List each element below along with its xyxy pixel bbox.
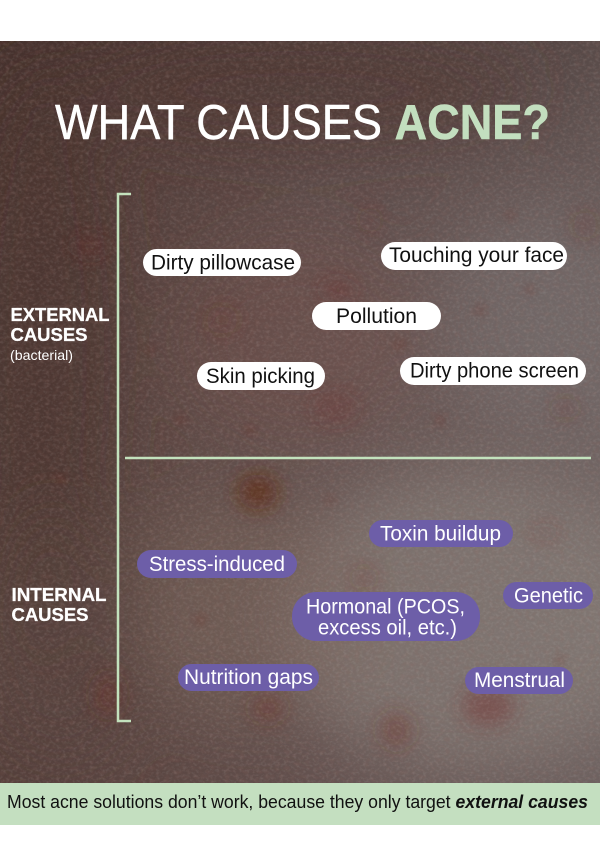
pill: genetic: Genetic	[514, 584, 583, 608]
pill: pollution	[312, 302, 441, 330]
label: internal causes: CAUSES	[12, 604, 88, 625]
label: external causes: (bacterial)	[10, 347, 73, 363]
bracket and divider lines	[118, 194, 591, 721]
internal cause pills	[137, 520, 593, 694]
pill: stress-induced: Stress-induced	[149, 553, 285, 576]
pill: menstrual: Menstrual	[474, 669, 565, 692]
pill: toxin buildup: Toxin buildup	[380, 522, 501, 546]
footer banner: Most acne solutions don’t work, because they only target external causes	[7, 791, 588, 812]
pill: nutrition gaps: Nutrition gaps	[184, 666, 313, 689]
title: WHAT CAUSES ACNE?	[55, 96, 550, 150]
footer banner	[0, 783, 600, 825]
label: external causes: CAUSES	[10, 324, 88, 345]
pill: skin picking: Skin picking	[206, 365, 315, 388]
label: internal causes	[12, 584, 106, 625]
pill: pollution: Pollution	[336, 305, 417, 328]
pill: dirty pillowcase: Dirty pillowcase	[151, 252, 295, 274]
pill: touching your face: Touching your face	[389, 244, 564, 267]
label: external causes: EXTERNAL	[10, 304, 110, 325]
label: internal causes: INTERNAL	[12, 584, 106, 605]
pill: hormonal: excess oil, etc.)	[318, 616, 457, 640]
pill: dirty phone screen: Dirty phone screen	[410, 360, 579, 382]
pill: hormonal	[292, 592, 480, 641]
pill: hormonal: Hormonal (PCOS,	[306, 596, 465, 618]
pill: genetic	[503, 582, 593, 609]
external cause pills	[143, 242, 586, 390]
label: external causes	[10, 304, 110, 363]
